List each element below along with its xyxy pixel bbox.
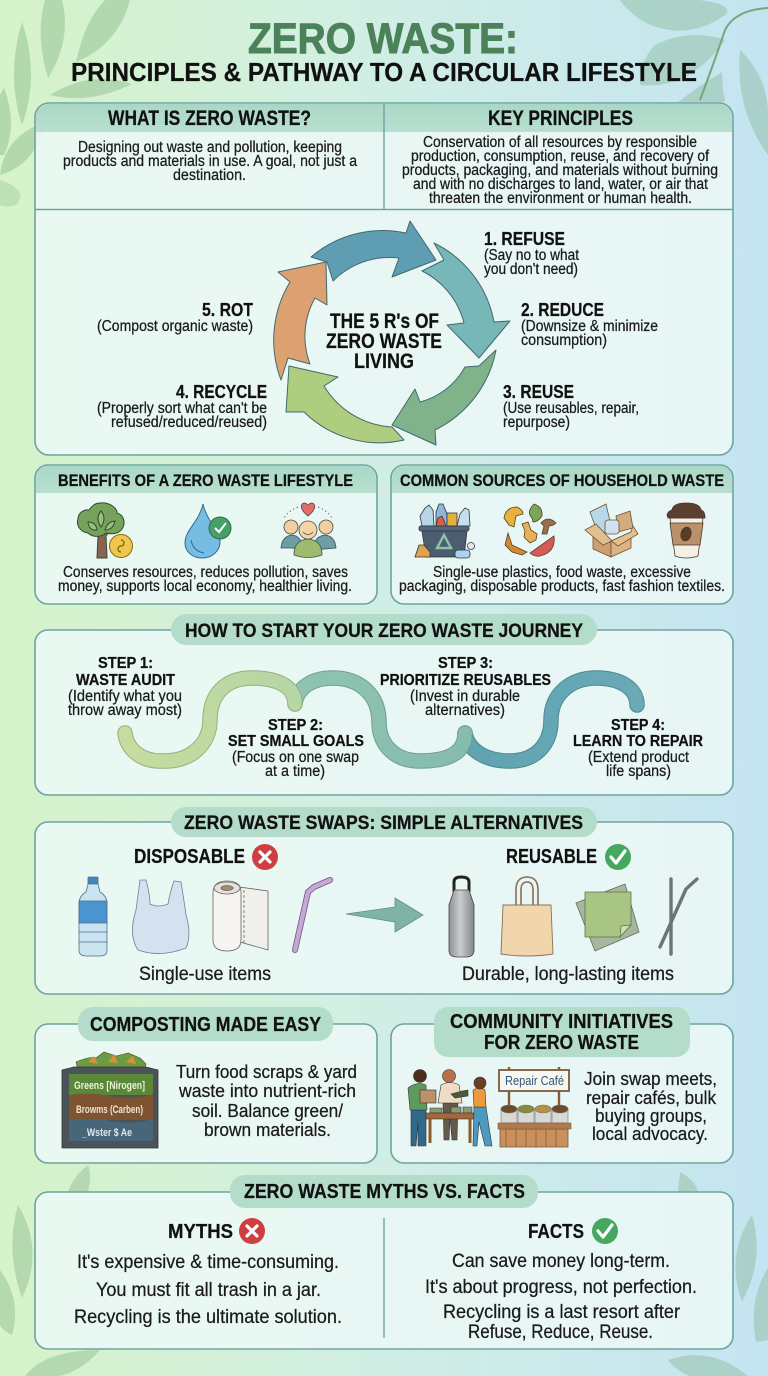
icon: community with heart [281, 503, 336, 558]
benefits text [58, 564, 352, 595]
key principles: threaten the environment or human health. [429, 190, 692, 207]
panel: household waste [391, 465, 733, 604]
household waste text: packaging, disposable products, fast fashion textiles. [399, 578, 725, 595]
icon: coffee cup [667, 503, 705, 558]
cycle centre label: LIVING [354, 350, 414, 373]
what is zero waste: WHAT IS ZERO WASTE? [108, 107, 311, 130]
key principles [402, 107, 718, 207]
facts column: It's about progress, not perfection. [425, 1277, 697, 1298]
cycle centre label [326, 310, 442, 373]
key principles: production, consumption, reuse, and recovery of [411, 148, 710, 165]
composting heading pill: COMPOSTING MADE EASY [90, 1014, 322, 1036]
label: recycle [97, 381, 267, 431]
icon: people at swap table [408, 1070, 492, 1146]
step 3: (Invest in durable [410, 688, 520, 705]
step 3: PRIORITIZE REUSABLES [380, 672, 551, 689]
journey heading pill [171, 614, 597, 645]
community text: buying groups, [595, 1105, 707, 1126]
label: recycle: refused/reduced/reused) [111, 414, 267, 431]
composting heading pill [78, 1007, 333, 1041]
label: refuse [484, 228, 580, 278]
arrow: reduce [422, 243, 510, 358]
community heading pill: COMMUNITY INITIATIVES [450, 1011, 673, 1033]
label: reduce: (Downsize & minimize [521, 318, 658, 335]
household waste heading: COMMON SOURCES OF HOUSEHOLD WASTE [400, 471, 724, 490]
cycle centre label: THE 5 R's OF [330, 310, 439, 333]
benefits text: money, supports local economy, healthier living. [58, 578, 352, 595]
step 1: STEP 1: [98, 655, 153, 672]
swaps captions: Durable, long-lasting items [462, 964, 674, 985]
step 4: life spans) [606, 763, 671, 780]
icon: tote bag [501, 877, 553, 956]
icon: plastic bag [132, 880, 189, 954]
title [71, 15, 697, 87]
what is zero waste: Designing out waste and pollution, keeping [78, 139, 342, 156]
step 4 [573, 717, 703, 780]
what is zero waste [63, 107, 357, 184]
icon: compost bin with layers [62, 1052, 158, 1148]
community heading pill: FOR ZERO WASTE [484, 1032, 639, 1054]
label: reduce [521, 299, 658, 349]
panel: composting [35, 1007, 377, 1163]
composting text: Turn food scraps & yard [176, 1061, 357, 1082]
myths column: You must fit all trash in a jar. [96, 1280, 321, 1301]
arrow: reuse [392, 350, 496, 445]
label: reduce: 2. REDUCE [521, 299, 604, 320]
facts column: Recycling is a last resort after [443, 1302, 681, 1323]
label: refuse: (Say no to what [484, 247, 580, 264]
step 1 [68, 655, 182, 719]
key principles: Conservation of all resources by responsible [423, 134, 697, 151]
label: rot: (Compost organic waste) [97, 318, 253, 335]
swaps captions [139, 964, 674, 985]
reusable heading: REUSABLE [506, 846, 597, 868]
icon: compost bin with layers: Greens [Nirogen] [74, 1080, 145, 1092]
label: reuse [503, 381, 639, 431]
label: reduce: consumption) [521, 332, 607, 349]
icon: plastic bottle [79, 877, 107, 956]
swaps heading pill: ZERO WASTE SWAPS: SIMPLE ALTERNATIVES [184, 812, 583, 834]
icon: paper towel roll [213, 881, 268, 951]
arrow: disposable to reusable [346, 898, 423, 932]
swaps captions: Single-use items [139, 964, 271, 985]
key principles: KEY PRINCIPLES [488, 107, 633, 130]
decorative leaves bottom right [668, 1172, 768, 1376]
myths column: It's expensive & time-consuming. [77, 1252, 339, 1273]
icon: recycling bin [415, 504, 474, 558]
icon: water drop with check [185, 504, 231, 558]
step 2: (Focus on one swap [232, 749, 359, 766]
arrow: recycle [286, 366, 404, 443]
label: rot [97, 299, 254, 335]
decorative leaves bottom left [0, 1165, 100, 1376]
what is zero waste: destination. [173, 167, 246, 184]
panel: benefits [35, 465, 377, 604]
community text: Join swap meets, [584, 1068, 717, 1089]
label: recycle: 4. RECYCLE [176, 381, 267, 402]
step 4: LEARN TO REPAIR [573, 733, 703, 750]
journey ribbon path [125, 678, 637, 761]
myths facts heading pill [230, 1175, 538, 1208]
myths facts heading pill: ZERO WASTE MYTHS VS. FACTS [244, 1181, 525, 1203]
step 2: SET SMALL GOALS [228, 733, 364, 750]
journey heading pill: HOW TO START YOUR ZERO WASTE JOURNEY [185, 620, 583, 642]
facts column: Refuse, Reduce, Reuse. [468, 1322, 653, 1343]
composting text: waste into nutrient-rich [178, 1080, 356, 1101]
panel: what is zero waste, key principles and 5 Rs [35, 103, 733, 455]
swaps heading pill [171, 807, 597, 837]
key principles: products, packaging, and materials without burning [402, 162, 718, 179]
panel: community [391, 1007, 733, 1163]
step 2: STEP 2: [268, 717, 323, 734]
label: reuse: repurpose) [503, 414, 570, 431]
step 4: (Extend product [588, 749, 690, 766]
label: rot: 5. ROT [202, 299, 254, 320]
step 2 [228, 717, 364, 780]
key principles: and with no discharges to land, water, or air that [413, 176, 709, 193]
composting text: soil. Balance green/ [192, 1100, 344, 1121]
myths column: Recycling is the ultimate solution. [74, 1307, 342, 1328]
title: ZERO WASTE: [248, 15, 518, 63]
icon: metal straws [660, 879, 697, 954]
facts column: Can save money long-term. [452, 1251, 670, 1272]
household waste text [399, 564, 725, 595]
icon: cloth napkins [576, 884, 639, 951]
step 2: at a time) [265, 763, 325, 780]
decorative leaves top right [620, 0, 768, 155]
step 3 [380, 655, 551, 719]
household waste text: Single-use plastics, food waste, excessive [433, 564, 691, 581]
icon: repair cafe stall: Repair Café [505, 1073, 564, 1088]
composting text: brown materials. [204, 1119, 331, 1140]
label: reuse: 3. REUSE [503, 381, 574, 402]
panel: journey [35, 614, 733, 795]
icon: compost bin with layers: Browms (Carben) [76, 1104, 143, 1116]
arrow: refuse [311, 221, 436, 281]
panel: myths vs facts [35, 1175, 733, 1349]
step 4: STEP 4: [611, 717, 665, 734]
panel: swaps [35, 807, 733, 994]
step 1: WASTE AUDIT [76, 672, 175, 689]
step 3: STEP 3: [438, 655, 493, 672]
myths column [74, 1218, 342, 1328]
facts column: FACTS [528, 1221, 584, 1243]
label: recycle: (Properly sort what can't be [97, 400, 267, 417]
icon: repair cafe stall [498, 1067, 571, 1147]
title: PRINCIPLES & PATHWAY TO A CIRCULAR LIFESTYLE [71, 57, 697, 87]
benefits heading: BENEFITS OF A ZERO WASTE LIFESTYLE [58, 471, 353, 490]
cycle centre label: ZERO WASTE [326, 330, 442, 353]
cycle diagram: 5 Rs [274, 221, 510, 445]
icon: tree and coin [77, 503, 132, 558]
decorative leaves top left [0, 0, 132, 206]
arrow: rot [274, 262, 327, 380]
step 1: throw away most) [68, 702, 182, 719]
community text [584, 1068, 717, 1144]
icon: compost bin with layers: _Wster $ Ae [81, 1127, 132, 1139]
composting text [176, 1061, 357, 1140]
icon: steel bottle [449, 877, 474, 957]
facts column [425, 1218, 697, 1343]
icon: bendy straw [295, 880, 330, 950]
community text: repair cafés, bulk [586, 1087, 717, 1108]
label: refuse: you don't need) [484, 261, 578, 278]
myths column: MYTHS [168, 1221, 233, 1243]
community text: local advocacy. [592, 1123, 708, 1144]
community heading pill [434, 1007, 690, 1057]
what is zero waste: products and materials in use. A goal, not just a [63, 153, 357, 170]
label: refuse: 1. REFUSE [484, 228, 565, 249]
disposable heading: DISPOSABLE [134, 846, 245, 868]
step 1: (Identify what you [68, 688, 182, 705]
step 3: alternatives) [425, 702, 505, 719]
label: reuse: (Use reusables, repair, [503, 400, 639, 417]
icon: food waste [504, 504, 556, 556]
benefits text: Conserves resources, reduces pollution, saves [63, 564, 348, 581]
icon: cardboard box [585, 504, 638, 557]
